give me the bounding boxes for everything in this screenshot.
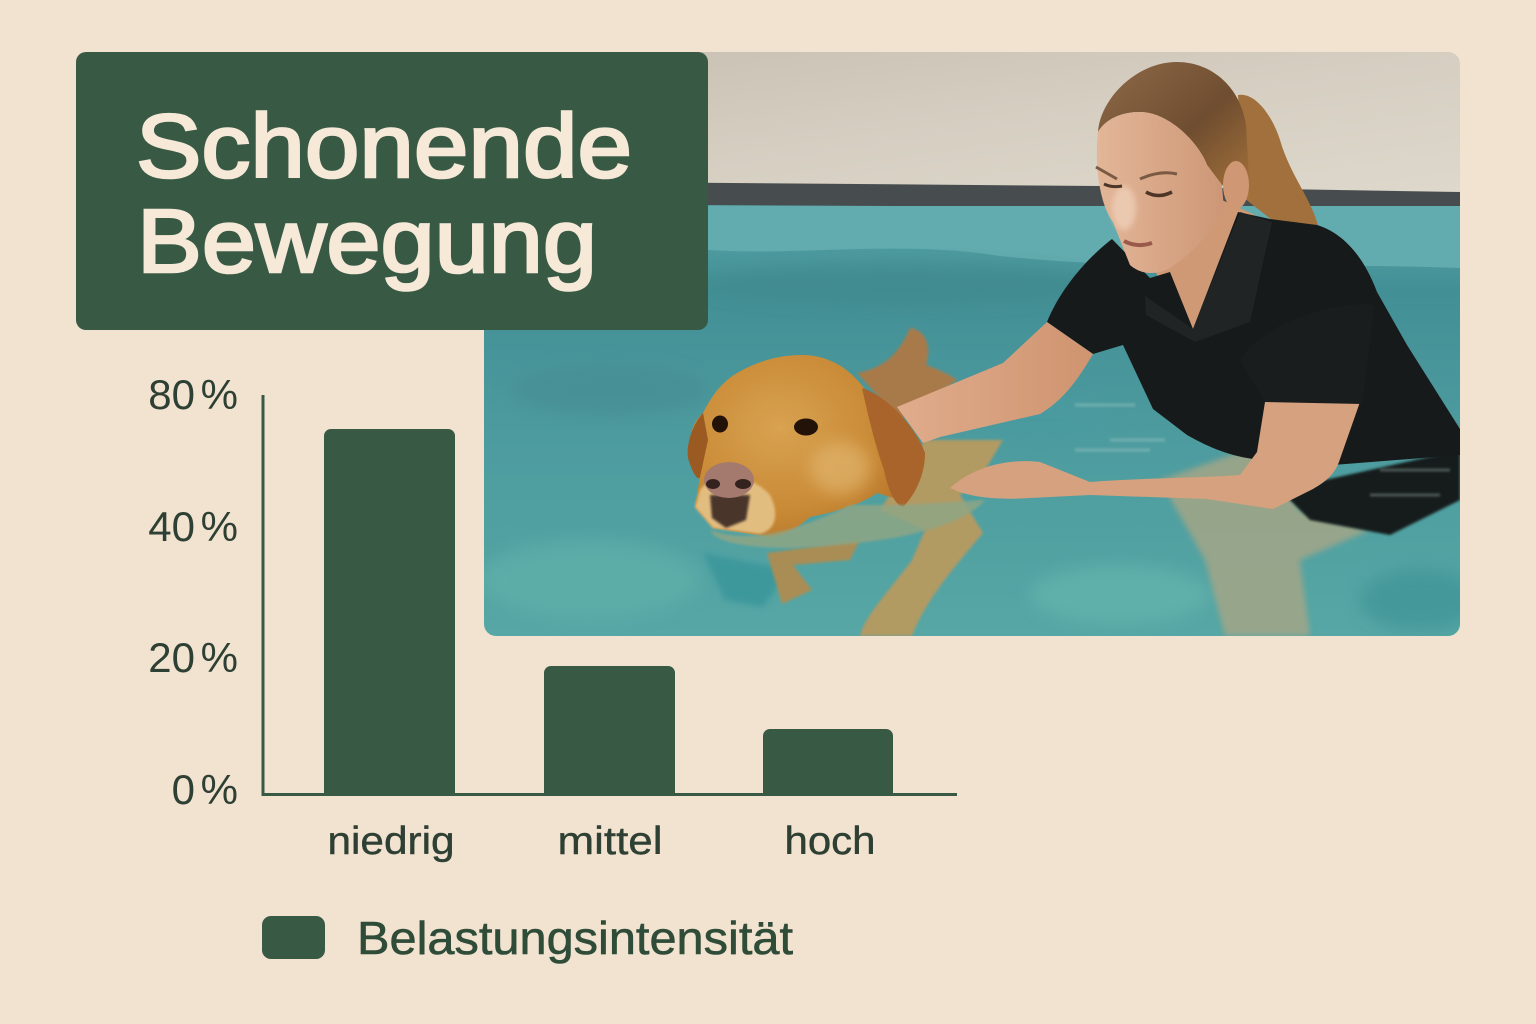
woman eyes and mouth	[1096, 167, 1177, 245]
collar	[1145, 212, 1272, 342]
sleeve	[1266, 402, 1360, 404]
pool ledge	[708, 182, 1460, 206]
x axis labels	[328, 820, 876, 863]
legend	[262, 912, 793, 964]
dog eyes	[712, 416, 728, 432]
nose highlight	[1112, 186, 1136, 230]
photo: therapist with dog in water	[480, 52, 1480, 636]
title panel	[76, 52, 708, 330]
water	[484, 204, 1460, 636]
face	[1097, 112, 1224, 273]
bar: hoch	[763, 729, 893, 794]
ponytail	[1238, 95, 1318, 226]
dog reflection shadow	[704, 554, 776, 608]
dog head	[688, 355, 925, 537]
bar: niedrig	[324, 429, 455, 794]
x axis labels: mittel	[558, 820, 662, 863]
y axis labels: 0 %	[172, 766, 238, 813]
dog nose	[704, 462, 754, 498]
woman right arm with hand in water	[950, 402, 1360, 509]
neck	[1156, 200, 1255, 329]
x axis labels: niedrig	[328, 820, 454, 863]
axes	[263, 395, 957, 794]
woman torso	[1047, 212, 1460, 465]
bar chart	[148, 371, 957, 863]
title: Schonende	[136, 97, 632, 197]
dog muzzle	[695, 477, 775, 534]
y axis labels: 80 %	[148, 371, 238, 418]
woman left arm with hand on dog	[897, 322, 1093, 443]
dog left ear	[688, 413, 708, 478]
title: Bewegung	[137, 192, 597, 292]
bar: mittel	[544, 666, 675, 794]
dog body and tail	[767, 328, 1003, 636]
x axis labels: hoch	[784, 820, 876, 863]
wall	[699, 52, 1460, 192]
water line around dog	[710, 500, 985, 548]
legend label: Belastungsintensität	[357, 912, 793, 964]
woman ear	[1223, 161, 1249, 209]
hair	[1098, 62, 1248, 186]
pool back wall water band	[708, 206, 1460, 268]
ripples	[490, 544, 1460, 632]
water ripples	[1075, 405, 1450, 495]
y axis labels	[148, 371, 238, 813]
dog cheek	[810, 442, 870, 494]
legend swatch	[262, 916, 325, 959]
dog right ear	[862, 388, 925, 507]
shirt reflection	[1280, 450, 1460, 535]
y axis labels: 40 %	[148, 503, 238, 550]
dog mouth shadow	[710, 495, 750, 528]
title	[136, 97, 632, 292]
y axis labels: 20 %	[148, 634, 238, 681]
woman legs under water	[1160, 445, 1370, 636]
